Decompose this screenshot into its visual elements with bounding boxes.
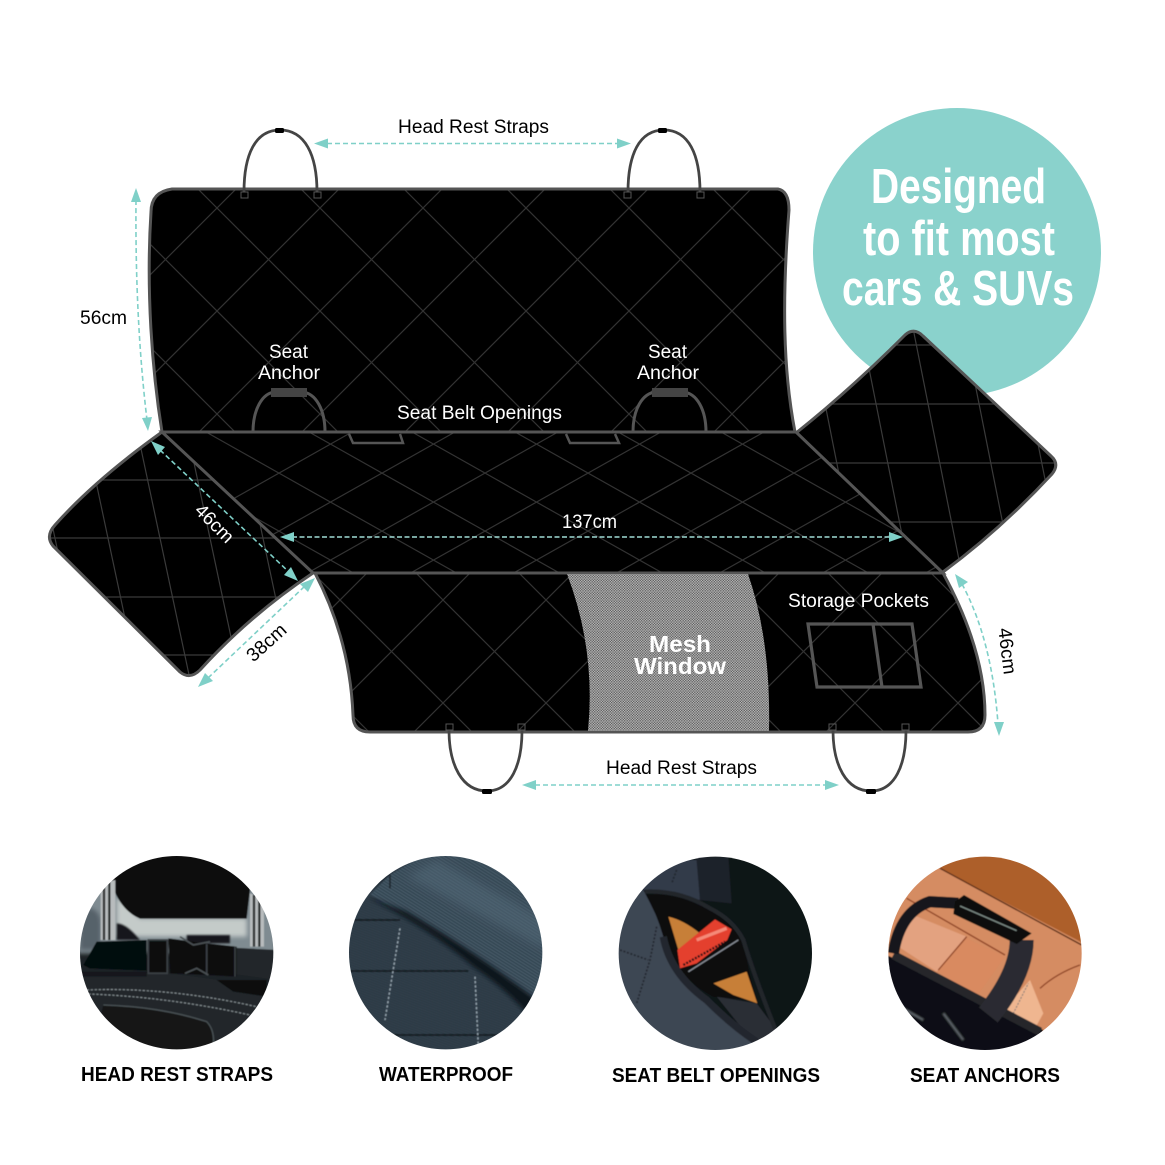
panel: right side flap (796, 330, 1058, 572)
badge: designed to fit most cars and SUVs: cars & SUVs (842, 262, 1074, 316)
dimension: 56cm: 56cm (80, 308, 127, 329)
head rest strap: bottom right (829, 724, 909, 794)
photo: head rest straps (77, 853, 277, 1053)
dimension: apron 46cm: 46cm (993, 627, 1020, 676)
dimension: flap 46cm: 46cm (190, 500, 238, 548)
photo: waterproof fabric (347, 853, 547, 1053)
panel: seat back with quilting (148, 188, 796, 430)
dimension: flap 38cm: 38cm (243, 620, 291, 666)
badge: designed to fit most cars and SUVs: Designed (871, 160, 1046, 214)
seat anchor: left: Anchor (258, 363, 321, 384)
mesh window (567, 574, 769, 731)
head rest strap: bottom left (446, 724, 525, 794)
panel: footwell apron (314, 574, 986, 734)
dimension: bottom head rest straps (522, 758, 839, 790)
seat anchor: left: Seat (269, 342, 309, 363)
dimension: top head rest straps: Head Rest Straps (398, 117, 549, 138)
photo: seat belt opening (617, 853, 817, 1053)
storage pockets (788, 591, 929, 687)
mesh window: Mesh (649, 631, 711, 657)
head rest strap: top left (241, 128, 321, 198)
panel: seat base with quilting (158, 430, 947, 574)
mesh window: Window (634, 653, 726, 679)
dimension: apron 46cm (955, 574, 1020, 736)
dimension: bottom head rest straps: Head Rest Straps (606, 758, 757, 779)
caption: seat anchors: SEAT ANCHORS (910, 1065, 1060, 1087)
panel: left side flap (48, 432, 314, 678)
seat belt openings: Seat Belt Openings (397, 403, 562, 424)
head rest strap: top right (624, 128, 704, 198)
seat anchor: right: Anchor (637, 363, 700, 384)
dimension: flap 38cm (198, 578, 315, 687)
dimension: flap 46cm (151, 441, 298, 581)
dimension: top head rest straps (314, 117, 631, 148)
dimension: 137cm (280, 512, 903, 542)
caption: head rest straps: HEAD REST STRAPS (81, 1064, 273, 1086)
badge: designed to fit most cars and SUVs (813, 108, 1101, 396)
badge: designed to fit most cars and SUVs: to fit most (863, 212, 1055, 266)
dimension: 137cm: 137cm (562, 512, 617, 533)
seat anchor: right (633, 342, 706, 432)
storage pockets: Storage Pockets (788, 591, 929, 612)
dimension: 56cm (80, 188, 152, 431)
photo: seat anchor (888, 856, 1082, 1050)
seat belt openings (349, 403, 619, 443)
seat anchor: left (253, 342, 325, 432)
caption: waterproof: WATERPROOF (379, 1064, 513, 1086)
caption: seat belt openings: SEAT BELT OPENINGS (612, 1065, 820, 1087)
seat anchor: right: Seat (648, 342, 688, 363)
